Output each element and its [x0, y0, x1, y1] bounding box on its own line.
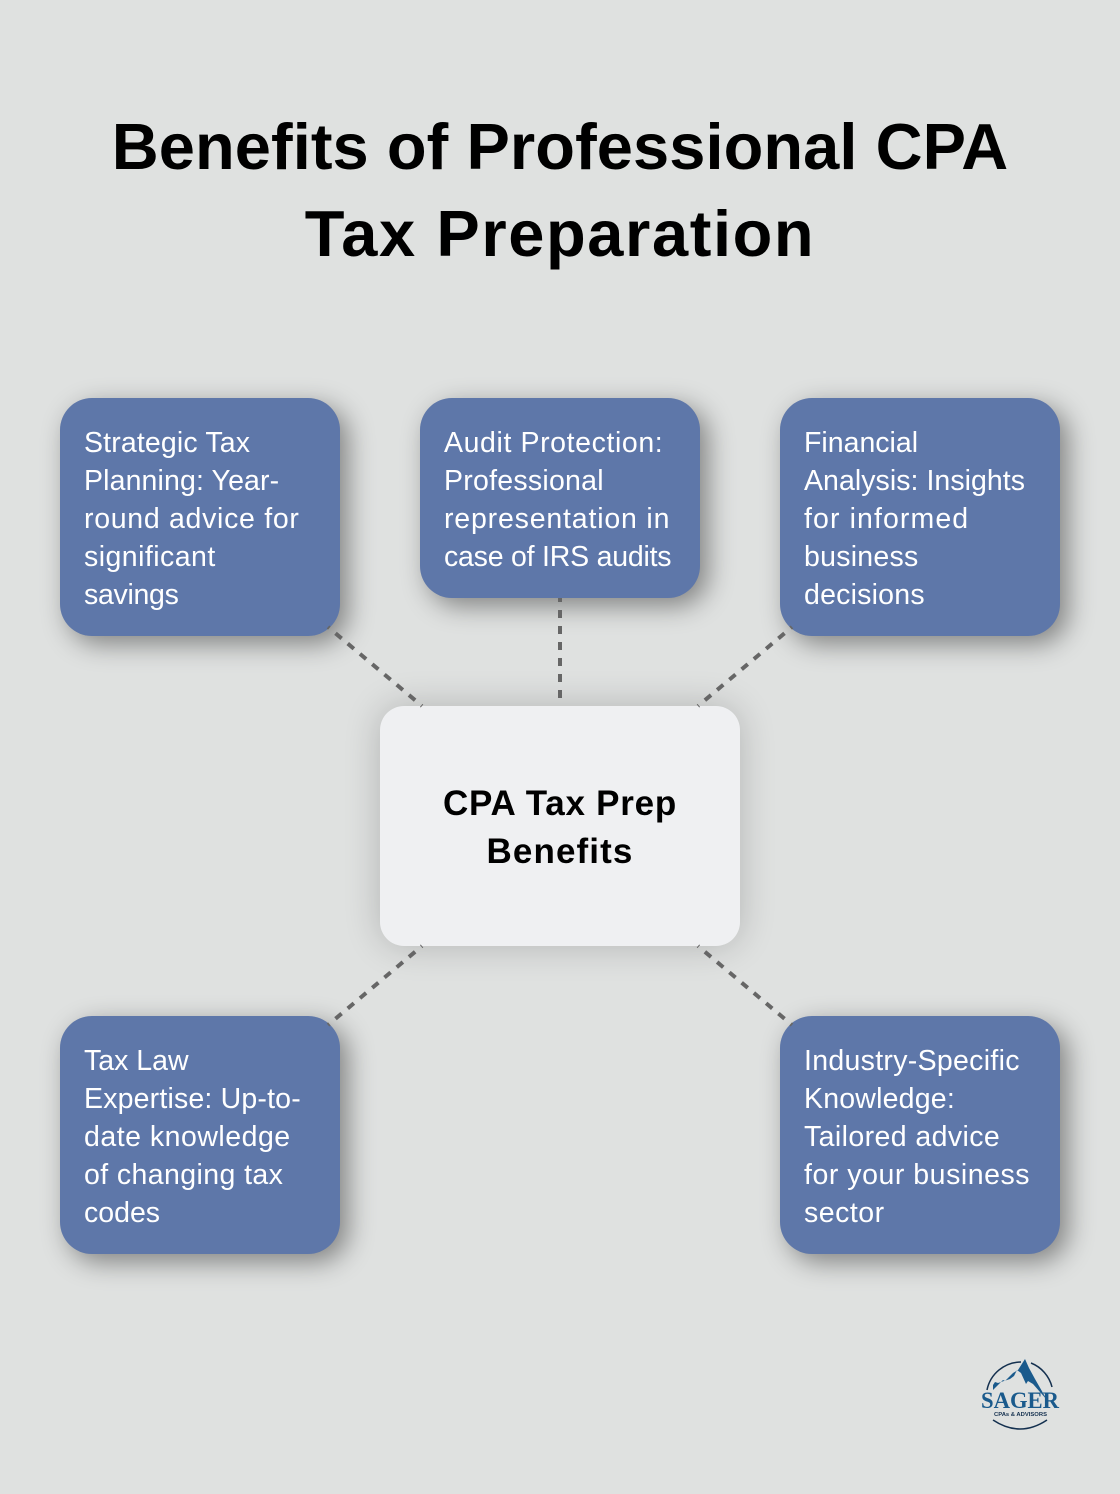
panel: Financial Analysis: Analysis: Insights	[804, 465, 1025, 497]
panel: Strategic Tax Planning: Strategic Tax	[84, 427, 250, 459]
title: Tax Preparation	[305, 197, 815, 270]
panel: Strategic Tax Planning: significant	[84, 541, 216, 573]
panel: Industry-Specific Knowledge: Knowledge:	[804, 1083, 955, 1115]
panel: Tax Law Expertise: Expertise: Up-to-	[84, 1083, 301, 1115]
title: Benefits of Professional CPA	[112, 110, 1008, 183]
panel: Strategic Tax Planning: Planning: Year-	[84, 465, 279, 497]
panel: Financial Analysis: Financial	[804, 427, 918, 459]
panel: Tax Law Expertise: codes	[84, 1197, 160, 1229]
logo: Sager CPAs & Advisors: CPAs & ADVISORS	[994, 1412, 1047, 1418]
panel: Audit Protection: representation in	[444, 503, 670, 535]
panel: center topic: CPA Tax Prep	[443, 784, 677, 823]
panel: Tax Law Expertise: date knowledge	[84, 1121, 291, 1153]
panel: Audit Protection: case of IRS audits	[444, 541, 671, 573]
title	[112, 110, 1008, 270]
panel: Industry-Specific Knowledge	[780, 1016, 1060, 1254]
panel: Industry-Specific Knowledge: sector	[804, 1197, 885, 1229]
panel: center topic: Benefits	[487, 832, 633, 871]
panel: Financial Analysis: for informed	[804, 503, 969, 535]
panel: Tax Law Expertise: Tax Law	[84, 1045, 189, 1077]
panel: Audit Protection: Professional	[444, 465, 604, 497]
panel: Financial Analysis	[780, 398, 1060, 636]
logo: Sager CPAs & Advisors: SAGER	[981, 1388, 1059, 1413]
panel: Strategic Tax Planning: round advice for	[84, 503, 300, 535]
panel: Financial Analysis: decisions	[804, 579, 925, 611]
panel: Industry-Specific Knowledge: Tailored advice	[804, 1121, 1000, 1153]
panel: center topic	[380, 706, 740, 946]
panel: Industry-Specific Knowledge: Industry-Specific	[804, 1045, 1020, 1077]
panel: Audit Protection: Audit Protection:	[444, 427, 663, 459]
panel: Financial Analysis: business	[804, 541, 918, 573]
panel: Strategic Tax Planning: savings	[84, 579, 179, 611]
panel: Industry-Specific Knowledge: for your business	[804, 1159, 1030, 1191]
panel: Tax Law Expertise	[60, 1016, 340, 1254]
panel: Strategic Tax Planning	[60, 398, 340, 636]
logo: Sager CPAs & Advisors	[981, 1359, 1060, 1430]
panel: Tax Law Expertise: of changing tax	[84, 1159, 283, 1191]
panel: Audit Protection	[420, 398, 700, 598]
